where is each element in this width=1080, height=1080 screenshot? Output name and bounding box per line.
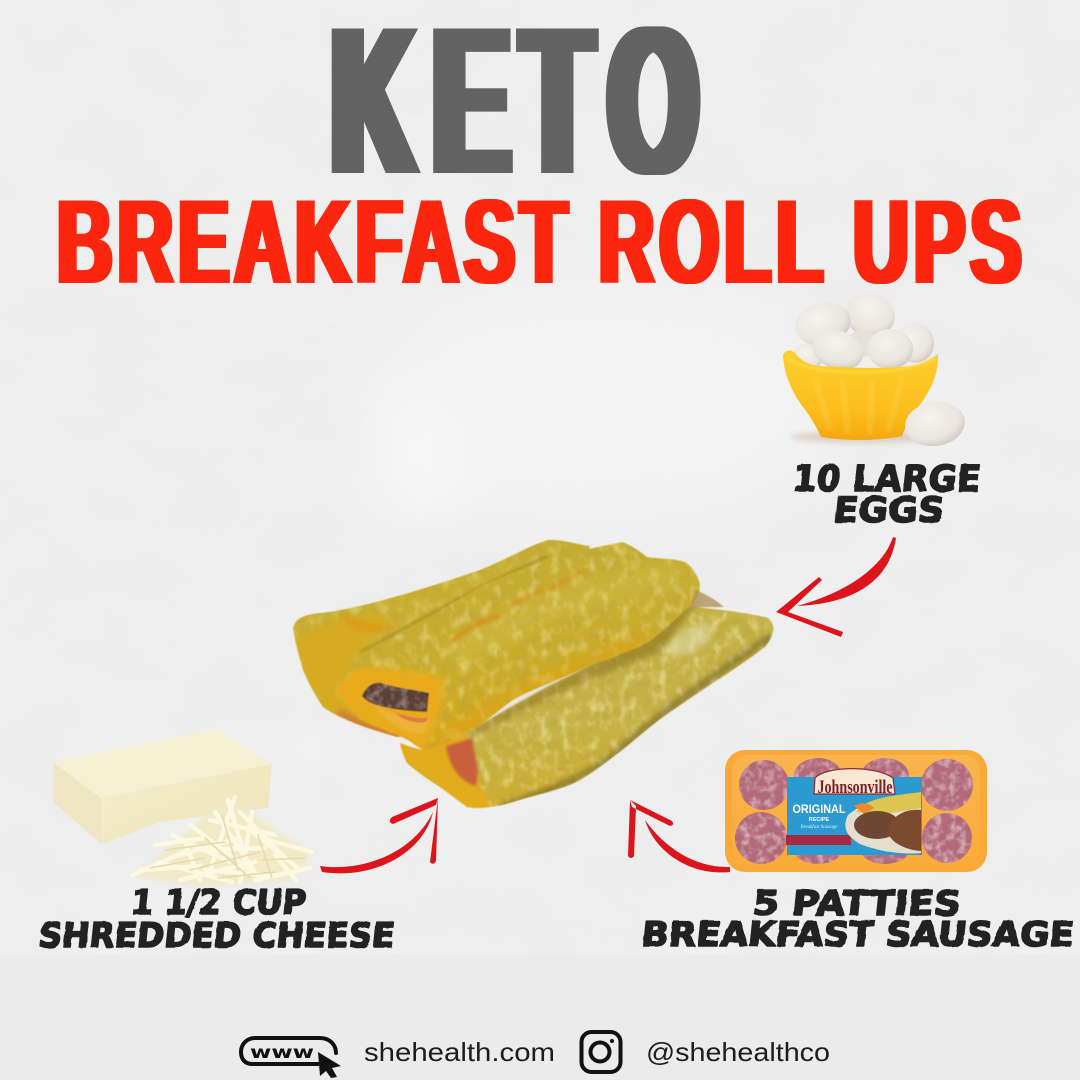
- loose egg: [902, 398, 968, 450]
- icon: instagram: [582, 1032, 620, 1072]
- brand banner: [814, 769, 895, 798]
- eggs in the bowl: [791, 286, 938, 376]
- open end of middle roll: [333, 667, 443, 752]
- label: 10 large eggs: 10 LARGE: [790, 458, 983, 500]
- bowl ribs: [815, 378, 902, 435]
- underside shadow: [500, 636, 772, 808]
- title: BREAKFAST ROLL UPS: BREAKFAST ROLL UPS: [57, 176, 1021, 309]
- cheese block: [53, 729, 272, 844]
- icon: sausage package: [725, 750, 987, 872]
- shadow between rolls: [467, 596, 702, 738]
- label: 10 large eggs: [790, 458, 983, 531]
- sausage patties: [735, 758, 973, 864]
- label: 5 patties breakfast sausage: BREAKFAST SAUSAGE: [640, 915, 1076, 955]
- pale patch near tip: [665, 621, 716, 660]
- sausage filling: [362, 683, 429, 712]
- icon: bowl shadow: [790, 431, 934, 443]
- lengthwise highlight and lower glow: [450, 575, 680, 660]
- icon: www pointer: [241, 1038, 341, 1078]
- label: 5 patties breakfast sausage: [640, 884, 1076, 955]
- middle roll: [333, 542, 700, 752]
- shredded cheese: [133, 797, 312, 886]
- product text: [792, 804, 846, 830]
- bowl rim highlight: [787, 358, 936, 372]
- bowl body: [783, 351, 938, 440]
- label: 1 1/2 cup shredded cheese: 1 1/2 CUP: [129, 883, 308, 923]
- product text: ORIGINAL: [792, 804, 846, 816]
- blue label: [787, 777, 922, 855]
- back roll: [293, 540, 590, 737]
- arrow: cheese to roll ups: [320, 798, 438, 873]
- brand banner: Johnsonville: [818, 777, 892, 798]
- arrow: sausage to roll ups: [628, 800, 730, 872]
- label: 1 1/2 cup shredded cheese: SHREDDED CHEESE: [37, 916, 397, 956]
- label: 1 1/2 cup shredded cheese: [37, 883, 397, 956]
- product text: Breakfast Sausage: [801, 825, 838, 830]
- open end with ham filling: [398, 733, 492, 810]
- shadow of middle roll on back roll: [360, 556, 548, 652]
- plate with patties: [845, 792, 921, 854]
- front roll: [398, 606, 773, 810]
- icon: www pointer: www: [250, 1043, 314, 1063]
- website text: shehealth.com: [364, 1037, 555, 1067]
- icon: cheese block and shreds: [53, 729, 312, 886]
- instagram handle: @shehealthco: [646, 1037, 830, 1067]
- footer: [241, 1032, 830, 1078]
- product text: RECIPE: [809, 817, 830, 823]
- red claim strip: [786, 835, 851, 845]
- illustration: keto breakfast roll ups: [293, 540, 773, 810]
- label: 10 large eggs: EGGS: [831, 490, 946, 531]
- arrow: eggs to roll ups: [776, 537, 896, 637]
- tan end of top roll: [688, 590, 724, 611]
- label: 5 patties breakfast sausage: 5 PATTIES: [751, 884, 963, 924]
- orange tray: [725, 750, 987, 872]
- icon: bowl of eggs: [783, 286, 968, 450]
- browned streak: [452, 615, 500, 642]
